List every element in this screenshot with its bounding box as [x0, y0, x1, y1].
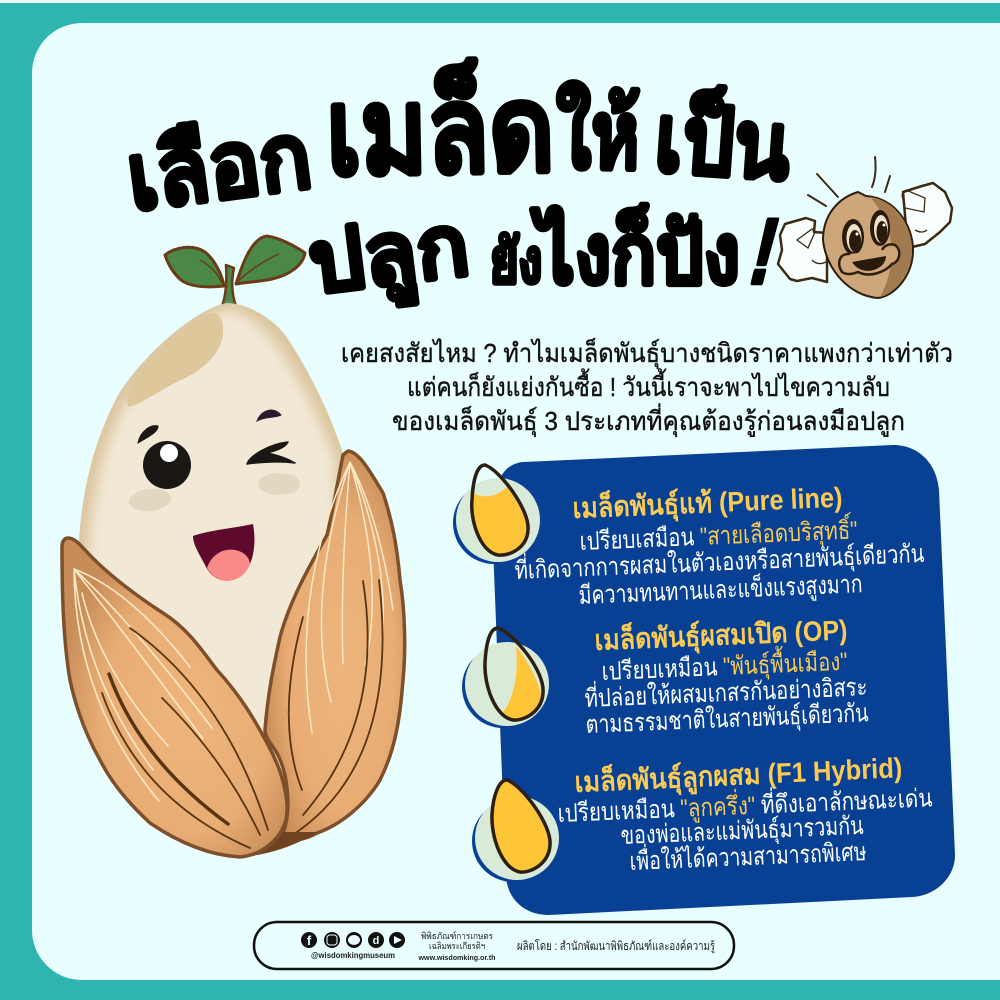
leaf veins — [200, 254, 279, 283]
left fist detail — [797, 229, 826, 264]
right husk — [265, 451, 405, 839]
text: f1 hybrid description: เพื่อให้ได้ความสามารถพิเศษ — [629, 834, 867, 876]
social icons — [301, 932, 405, 948]
nut eyes — [842, 210, 890, 255]
husk light veins — [74, 569, 212, 801]
text: pure line description — [514, 511, 925, 611]
intro text: แต่คนก็ยังแย่งกันซื้อ ! วันนี้เราจะพาไปไขความลับ — [407, 368, 890, 402]
icon: muscular nut mascot — [778, 157, 952, 298]
winking eye — [247, 442, 295, 464]
title: เลือก — [121, 105, 317, 230]
kernel blotch — [127, 313, 223, 406]
right arm — [903, 183, 952, 248]
husk dark veins — [289, 580, 383, 832]
stem — [222, 265, 236, 306]
husk light veins — [306, 462, 393, 733]
intro text: ของเมล็ดพันธุ์ 3 ประเภทที่คุณต้องรู้ก่อนลงมือปลูก — [392, 403, 905, 437]
text: pure line description: เปรียบเสมือน "สายเลือดบริสุทธิ์" — [579, 511, 858, 557]
nut body — [823, 192, 913, 298]
social handle: @wisdomkingmuseum — [311, 951, 395, 960]
icon: f1 hybrid seed — [472, 780, 559, 882]
left leaf — [165, 247, 224, 287]
title: ! — [741, 199, 789, 303]
title: เมล็ด — [325, 56, 555, 200]
text: open pollinated description: ตามธรรมชาติในสายพันธุ์เดียวกัน — [585, 698, 869, 740]
title: ไงก็ปัง — [530, 203, 740, 301]
title: เป็น — [652, 80, 794, 199]
icon: pure line seed — [453, 465, 540, 564]
museum name and site: พิพิธภัณฑ์การเกษตร — [421, 930, 493, 941]
icon: action rays — [808, 157, 890, 206]
mouth — [193, 524, 254, 581]
text: f1 hybrid description: ของพ่อและแม่พันธุ์มารวมกัน — [620, 812, 864, 851]
museum name and site: www.wisdomking.or.th — [418, 953, 496, 962]
kernel — [78, 303, 345, 800]
producer credit: ผลิตโดย : สำนักพัฒนาพิพิธภัณฑ์และองค์ความรู้ — [517, 939, 715, 954]
title: ยัง — [490, 228, 542, 295]
seed character — [62, 236, 405, 857]
left husk — [62, 538, 287, 857]
left arm — [778, 218, 827, 282]
heading: f1 hybrid: เมล็ดพันธุ์ลูกผสม (F1 Hybrid) — [574, 750, 903, 800]
text: open pollinated description: เปรียบเหมือน "พันธุ์พื้นเมือง" — [601, 643, 848, 687]
icon: open pollinated seed — [462, 628, 549, 728]
heading: pure line: เมล็ดพันธุ์แท้ (Pure line) — [572, 480, 843, 526]
text: open pollinated description — [584, 643, 869, 740]
right fist detail — [902, 190, 927, 232]
text: open pollinated description: ที่ปล่อยให้ผสมเกสรกันอย่างอิสระ — [584, 669, 868, 713]
right leaf — [236, 236, 305, 284]
blue info panel — [453, 445, 955, 915]
social icons: f — [307, 933, 312, 948]
cheeks — [128, 473, 300, 513]
museum name and site: เฉลิมพระเกียรติฯ — [429, 941, 485, 951]
text: pure line description: มีความทนทานและแข็งแรงสูงมาก — [578, 568, 863, 611]
text: f1 hybrid description — [557, 780, 933, 876]
title — [121, 56, 794, 317]
nut cheeks and mouth — [839, 244, 899, 274]
social icons: d — [373, 935, 379, 947]
text: f1 hybrid description: เปรียบเหมือน "ลูกครึ่ง" ที่ดึงเอาลักษณะเด่น — [557, 780, 933, 829]
sprout — [165, 236, 305, 306]
intro text — [341, 337, 953, 437]
heading: open pollinated: เมล็ดพันธุ์ผสมเปิด (OP) — [594, 612, 848, 658]
kernel light interior — [88, 310, 338, 785]
husk dark veins — [102, 628, 268, 848]
brow right — [257, 410, 281, 421]
footer bar — [254, 922, 734, 969]
title: ให้ — [555, 81, 640, 188]
title: ปลูก — [304, 197, 475, 317]
eye — [143, 441, 191, 489]
intro text: เคยสงสัยไหม ? ทำไมเมล็ดพันธุ์บางชนิดราคาแพงกว่าเท่าตัว — [341, 337, 953, 369]
brow left — [138, 426, 158, 443]
husk joint shadow — [245, 832, 318, 857]
museum name and site — [418, 930, 496, 962]
